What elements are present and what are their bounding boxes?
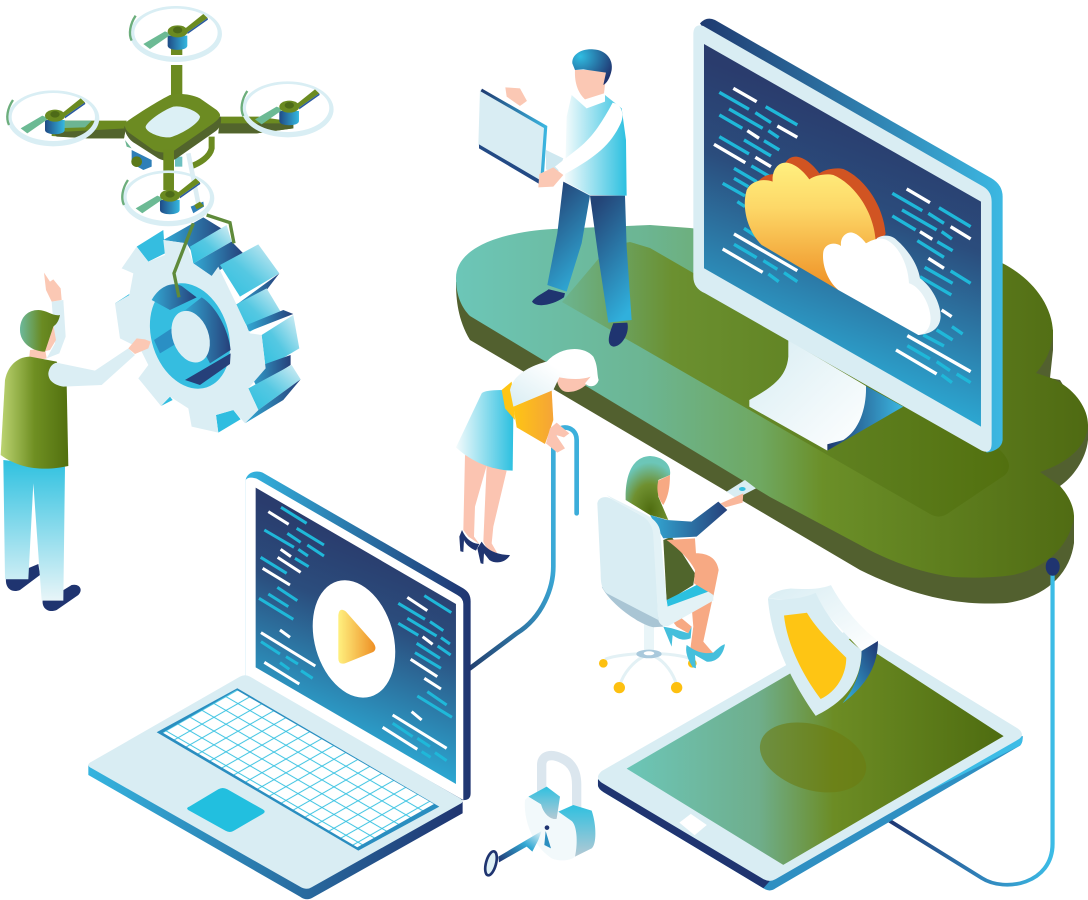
shackle bbox=[542, 756, 577, 812]
hair bbox=[20, 310, 60, 352]
drone bbox=[7, 6, 334, 226]
play button bbox=[300, 570, 408, 707]
left cable bbox=[470, 427, 577, 668]
lock body bbox=[525, 787, 595, 860]
keyhole bbox=[544, 825, 551, 848]
hair bbox=[510, 349, 599, 407]
hands bbox=[546, 423, 569, 453]
monitor stand bbox=[749, 340, 903, 451]
rotor: top bbox=[130, 6, 222, 62]
man with laptop bbox=[478, 49, 632, 347]
man at gear bbox=[1, 273, 151, 611]
legs bbox=[463, 455, 507, 555]
monitor case bbox=[693, 19, 1003, 453]
gear bbox=[115, 215, 301, 433]
padlock and key bbox=[483, 756, 595, 877]
shield bbox=[768, 585, 878, 716]
white cloud icon bbox=[823, 233, 941, 335]
gear hub bbox=[137, 273, 243, 399]
orange cloud icon bbox=[745, 157, 886, 290]
face bbox=[557, 375, 592, 392]
skirt bbox=[456, 390, 513, 471]
collar bbox=[580, 95, 605, 108]
drone arms bbox=[52, 48, 293, 138]
tablet body bbox=[598, 629, 1022, 881]
hook wire bbox=[174, 215, 234, 297]
neck bbox=[29, 348, 47, 361]
seated woman on chair bbox=[597, 456, 756, 693]
drone camera and landing gear bbox=[125, 137, 212, 213]
arm sleeve bbox=[650, 502, 727, 538]
code lines bbox=[714, 88, 971, 383]
keyboard bbox=[157, 688, 439, 851]
held laptop bbox=[478, 89, 563, 184]
arm bbox=[48, 348, 135, 387]
trousers bbox=[3, 460, 65, 601]
vest bbox=[565, 95, 627, 196]
code lines bbox=[259, 507, 452, 761]
near shoe bbox=[686, 644, 725, 668]
rotor: bottom bbox=[122, 170, 214, 226]
trousers bbox=[532, 182, 632, 347]
chair base bbox=[599, 623, 697, 693]
shoes bbox=[459, 530, 510, 564]
key bbox=[483, 831, 542, 877]
left sleeve bbox=[520, 101, 568, 163]
face bbox=[43, 325, 56, 352]
laptop lid bbox=[246, 471, 471, 800]
jacket bbox=[502, 382, 553, 444]
near lower leg bbox=[690, 595, 713, 655]
rotor: right bbox=[242, 81, 334, 137]
thigh bbox=[667, 538, 719, 597]
vest bbox=[1, 357, 68, 469]
tablet bbox=[598, 629, 1023, 890]
laptop bbox=[88, 471, 471, 899]
raised arm bbox=[47, 300, 66, 358]
home button bbox=[679, 814, 707, 835]
shoes bbox=[6, 564, 81, 611]
right arm and hand bbox=[538, 103, 622, 187]
rotor: left bbox=[7, 90, 99, 146]
hand bbox=[128, 338, 151, 354]
monitor bbox=[693, 19, 1003, 453]
right cable bbox=[887, 566, 1053, 885]
raised hand bbox=[44, 273, 62, 302]
hair bbox=[626, 456, 670, 520]
head bbox=[572, 49, 612, 99]
chair seat and back bbox=[597, 495, 713, 627]
raised hand bbox=[505, 87, 527, 106]
woman with cane bbox=[456, 349, 599, 564]
face bbox=[657, 475, 670, 505]
tablet edge bbox=[598, 736, 1023, 890]
shield shadow bbox=[748, 709, 878, 806]
far leg and shoe bbox=[663, 618, 692, 647]
gear teeth bbox=[115, 217, 301, 433]
torso bbox=[663, 537, 695, 602]
tablet screen bbox=[627, 637, 1004, 865]
phone and hand bbox=[721, 480, 756, 507]
laptop base bbox=[88, 675, 463, 899]
drone body bbox=[124, 94, 221, 190]
cable connector bbox=[1046, 558, 1060, 576]
cloud platform bbox=[456, 225, 1088, 604]
gear face bbox=[115, 240, 266, 433]
monitor screen bbox=[704, 44, 981, 427]
laptop screen bbox=[256, 488, 456, 784]
trackpad bbox=[187, 788, 265, 832]
